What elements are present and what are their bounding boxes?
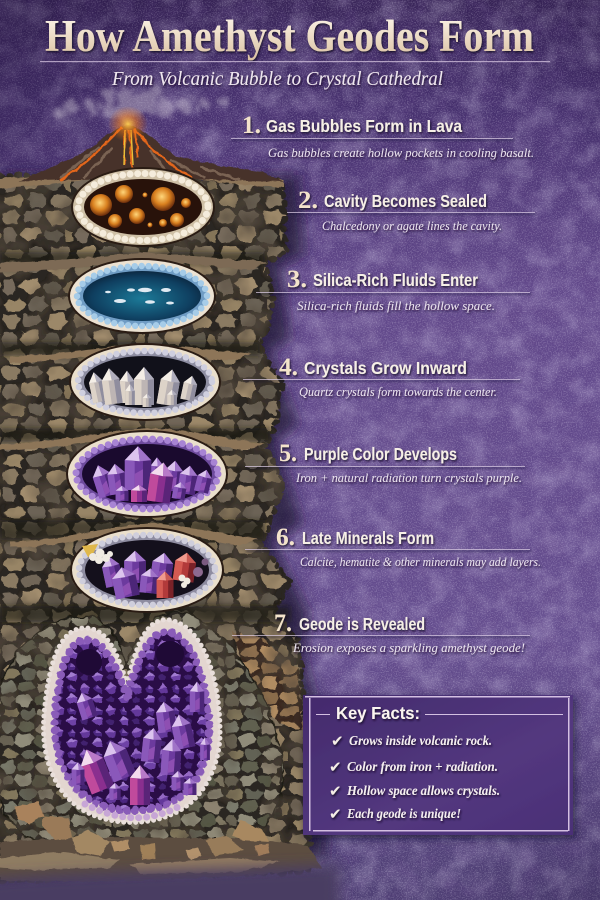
step 5 label: Purple Color Develops: [304, 444, 457, 464]
step 1 label: 1.: [242, 112, 261, 139]
step 3 label: Silica-Rich Fluids Enter: [313, 270, 478, 290]
volcano with lava streams: [18, 106, 284, 182]
strata lips between layers: [0, 163, 284, 547]
step 2 label: 2.: [298, 187, 318, 214]
step 3 label: 3.: [287, 266, 307, 293]
rubble pile right of geode: [232, 632, 304, 730]
step 5 label: [245, 440, 525, 485]
step 7 label: 7.: [274, 610, 292, 637]
key facts list: ✔: [329, 805, 342, 823]
step 4 label: [243, 354, 520, 399]
step 7 label: Erosion exposes a sparkling amethyst geode!: [292, 641, 525, 655]
step 4 label: Crystals Grow Inward: [304, 358, 467, 378]
volcano smoke: [55, 86, 226, 123]
rock column shadow fringe: [0, 175, 330, 880]
step 5 label: Iron + natural radiation turn crystals purple.: [295, 471, 522, 485]
step 6 label: Calcite, hematite & other minerals may add layers.: [300, 555, 541, 569]
key facts list: ✔: [329, 782, 342, 800]
geode lower bead overlay: [85, 804, 180, 818]
geode purple lining with crystal field fill: [55, 632, 209, 811]
key facts list: ✔: [329, 758, 342, 776]
step 1 label: Gas bubbles create hollow pockets in cooling basalt.: [268, 146, 534, 160]
key facts heading: Key Facts:: [336, 703, 420, 723]
geode rock shell: [0, 612, 283, 842]
key facts list: [329, 732, 500, 823]
step 4 label: Quartz crystals form towards the center.: [299, 385, 497, 399]
rubble at geode base: [0, 802, 322, 882]
key facts list: ✔: [331, 732, 344, 750]
step 7 label: Geode is Revealed: [299, 614, 425, 634]
key facts list: Hollow space allows crystals.: [346, 784, 500, 799]
step 1 label: Gas Bubbles Form in Lava: [266, 116, 462, 136]
step 6 label: Late Minerals Form: [302, 528, 434, 548]
key facts list: Color from iron + radiation.: [347, 760, 498, 775]
panel: key facts: [303, 695, 573, 835]
step 3 label: Silica-rich fluids fill the hollow space.: [297, 299, 495, 313]
step 4 label: 4.: [279, 354, 298, 381]
step 2 label: [287, 187, 535, 233]
subtitle: From Volcanic Bubble to Crystal Cathedral: [111, 68, 443, 90]
ground fade into purple: [0, 864, 340, 900]
step 3 cavity: silica fluid: [68, 258, 216, 334]
step 3 label: [256, 266, 530, 313]
step 2 label: Cavity Becomes Sealed: [324, 191, 487, 211]
step 5 label: 5.: [279, 440, 297, 467]
step 5 cavity: purple amethyst crystals: [66, 430, 228, 518]
geological cross-section illustration: [0, 86, 340, 900]
step 2 label: Chalcedony or agate lines the cavity.: [322, 219, 502, 233]
step 1 cavity: gas bubbles in lava: [71, 167, 215, 247]
step 7 label: [232, 610, 530, 655]
key facts list: Each geode is unique!: [346, 807, 461, 822]
geode crystal field: [72, 641, 210, 805]
title: How Amethyst Geodes Form: [45, 11, 534, 61]
step 6 label: 6.: [276, 524, 295, 551]
key facts list: Grows inside volcanic rock.: [349, 734, 492, 749]
step 6 cavity: late minerals: [70, 527, 224, 613]
step 6 label: [245, 524, 541, 569]
geode white bead rim: [43, 620, 220, 822]
step 7: open geode: [0, 612, 304, 842]
step 1 label: [231, 112, 534, 160]
dark soil bands above each stratum: [0, 252, 290, 622]
rock column: basalt cobbles: [0, 176, 312, 880]
title rule: [40, 61, 550, 62]
step 4 cavity: clear quartz crystals: [69, 343, 221, 421]
